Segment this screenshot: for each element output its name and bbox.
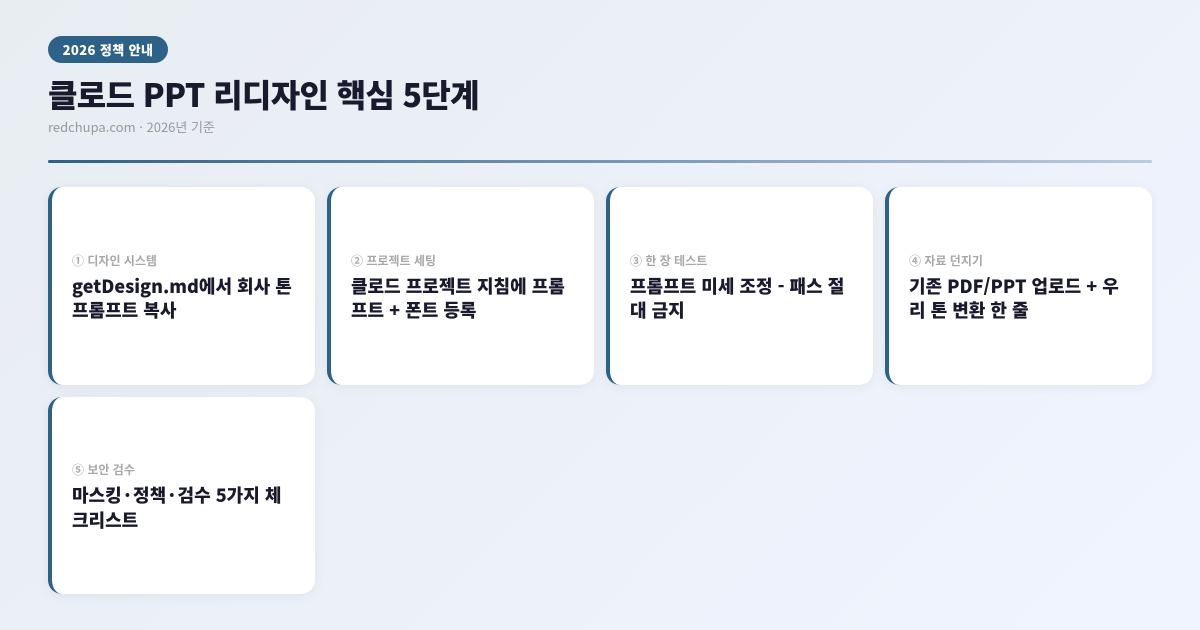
step label: ② 프로젝트 세팅 <box>351 252 436 269</box>
title: 클로드 PPT 리디자인 핵심 5단계 <box>48 71 479 117</box>
badge: 2026 정책 안내 <box>63 40 153 59</box>
subtitle: redchupa.com · 2026년 기준 <box>48 117 215 136</box>
step text: 마스킹·정책·검수 5가지 체크리스트 <box>72 482 281 533</box>
step text: 프롬프트 미세 조정 - 패스 절대 금지 <box>630 273 844 323</box>
step text: 기존 PDF/PPT 업로드 + 우리 톤 변환 한 줄 <box>909 273 1119 323</box>
step text: getDesign.md에서 회사 톤 프롬프트 복사 <box>72 273 292 323</box>
card: step 5 <box>48 397 315 594</box>
card: step 4 <box>885 187 1152 385</box>
step text: 클로드 프로젝트 지침에 프롬프트 + 폰트 등록 <box>351 273 565 323</box>
header divider <box>48 160 1152 163</box>
badge <box>48 36 168 63</box>
step label: ④ 자료 던지기 <box>909 252 983 269</box>
step label: ③ 한 장 테스트 <box>630 252 707 269</box>
step label: ⑤ 보안 검수 <box>72 461 135 478</box>
card: step 1 <box>48 187 315 385</box>
card: step 2 <box>327 187 594 385</box>
step label: ① 디자인 시스템 <box>72 252 157 269</box>
card: step 3 <box>606 187 873 385</box>
